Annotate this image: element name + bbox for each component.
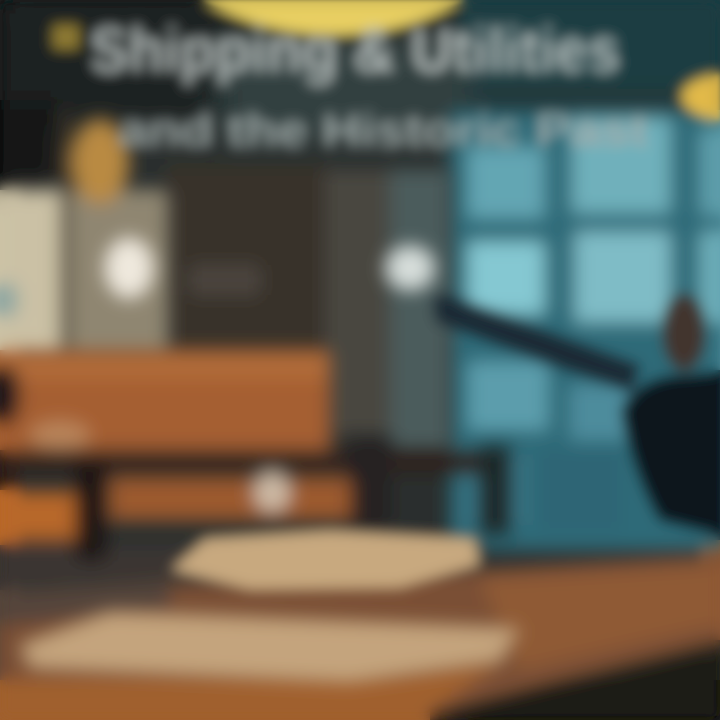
left column and panel — [0, 110, 168, 355]
person silhouette — [432, 294, 720, 535]
dark table corner — [430, 645, 720, 720]
background wall — [0, 0, 720, 190]
top center lamp — [200, 0, 466, 36]
open book — [170, 530, 480, 590]
table — [0, 555, 720, 720]
blurred title: Shipping & Utilities — [90, 14, 620, 86]
interior center dark panel — [165, 165, 450, 450]
blurred title — [90, 14, 648, 156]
right lamp — [680, 73, 720, 121]
blurred title: and the Historic Past — [118, 104, 648, 156]
glow lights — [105, 238, 434, 298]
bench — [0, 350, 510, 585]
small yellow spot — [52, 24, 80, 50]
window panel — [450, 110, 720, 550]
paper on table — [20, 612, 520, 682]
